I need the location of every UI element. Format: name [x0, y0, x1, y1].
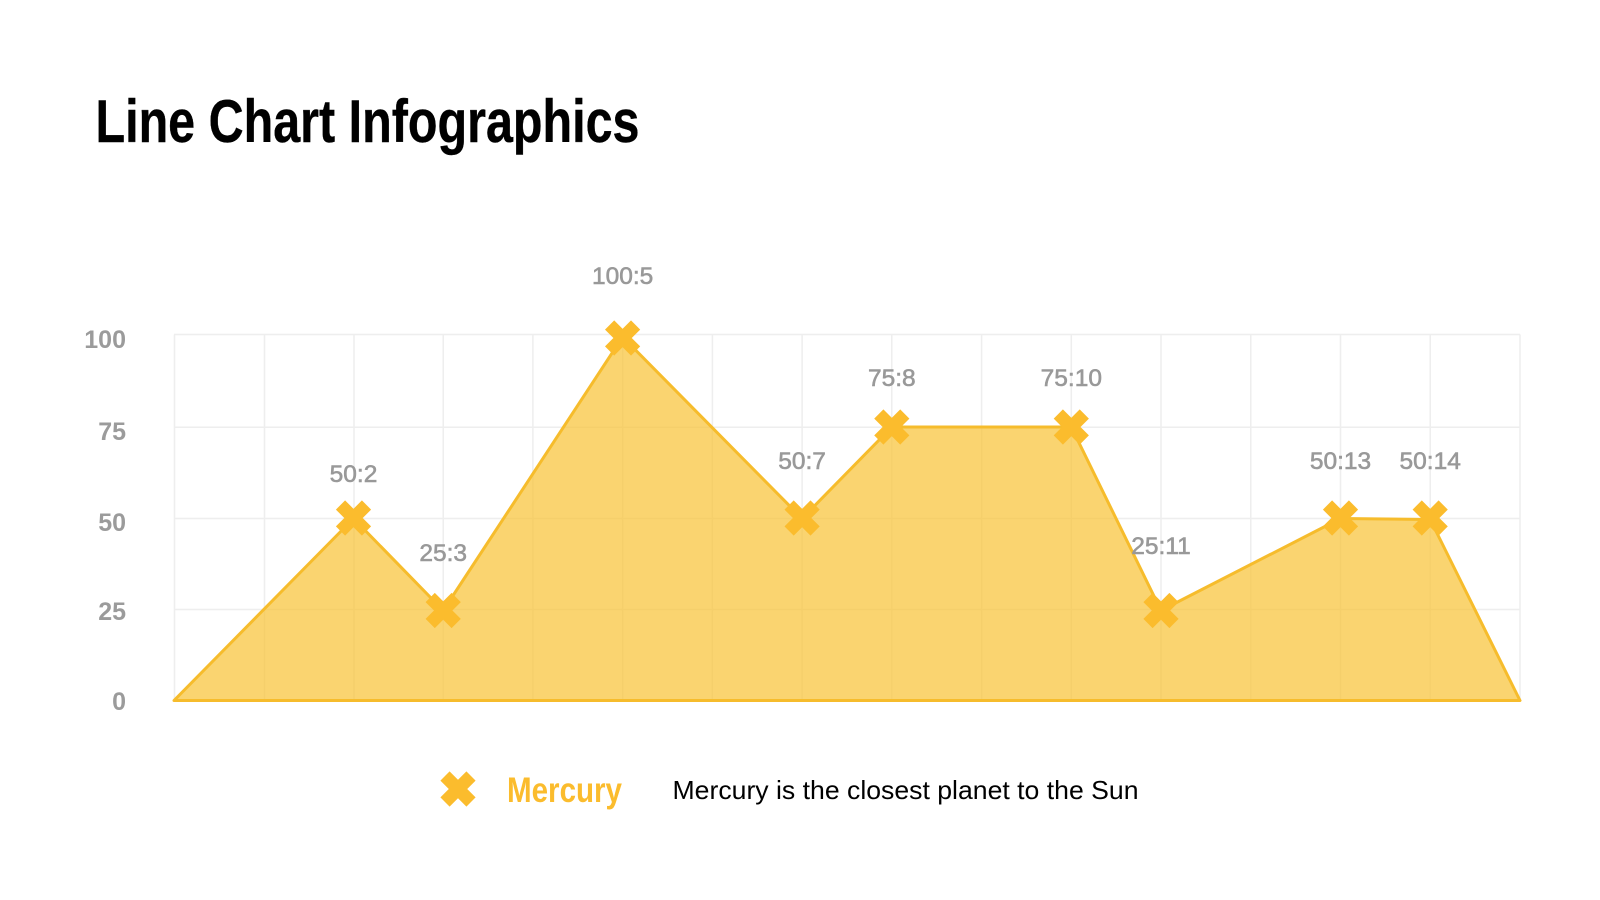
- data markers: [340, 325, 1443, 624]
- y axis labels: 100: [84, 326, 126, 354]
- y axis labels: [84, 326, 126, 716]
- data labels: 50:14: [1400, 448, 1461, 475]
- data labels: 25:3: [419, 540, 467, 567]
- data labels: 25:11: [1131, 533, 1191, 560]
- line chart: [84, 263, 1520, 716]
- y axis labels: 75: [98, 418, 126, 446]
- data labels: 50:2: [330, 461, 377, 488]
- y axis labels: 25: [98, 598, 126, 626]
- legend label: Mercury: [507, 771, 622, 810]
- legend: [445, 771, 1138, 810]
- data labels: 50:13: [1310, 448, 1371, 475]
- y axis labels: 0: [112, 688, 126, 716]
- data labels: 75:10: [1041, 365, 1102, 392]
- data labels: 50:7: [778, 448, 826, 475]
- y axis labels: 50: [98, 509, 126, 537]
- area series: Mercury: [174, 337, 1520, 700]
- title: Line Chart Infographics: [96, 88, 640, 155]
- data labels: 100:5: [592, 263, 653, 290]
- legend description: Mercury is the closest planet to the Sun: [672, 775, 1138, 805]
- data labels: [330, 263, 1461, 567]
- icon: legend marker: [445, 776, 471, 802]
- data labels: 75:8: [868, 365, 916, 392]
